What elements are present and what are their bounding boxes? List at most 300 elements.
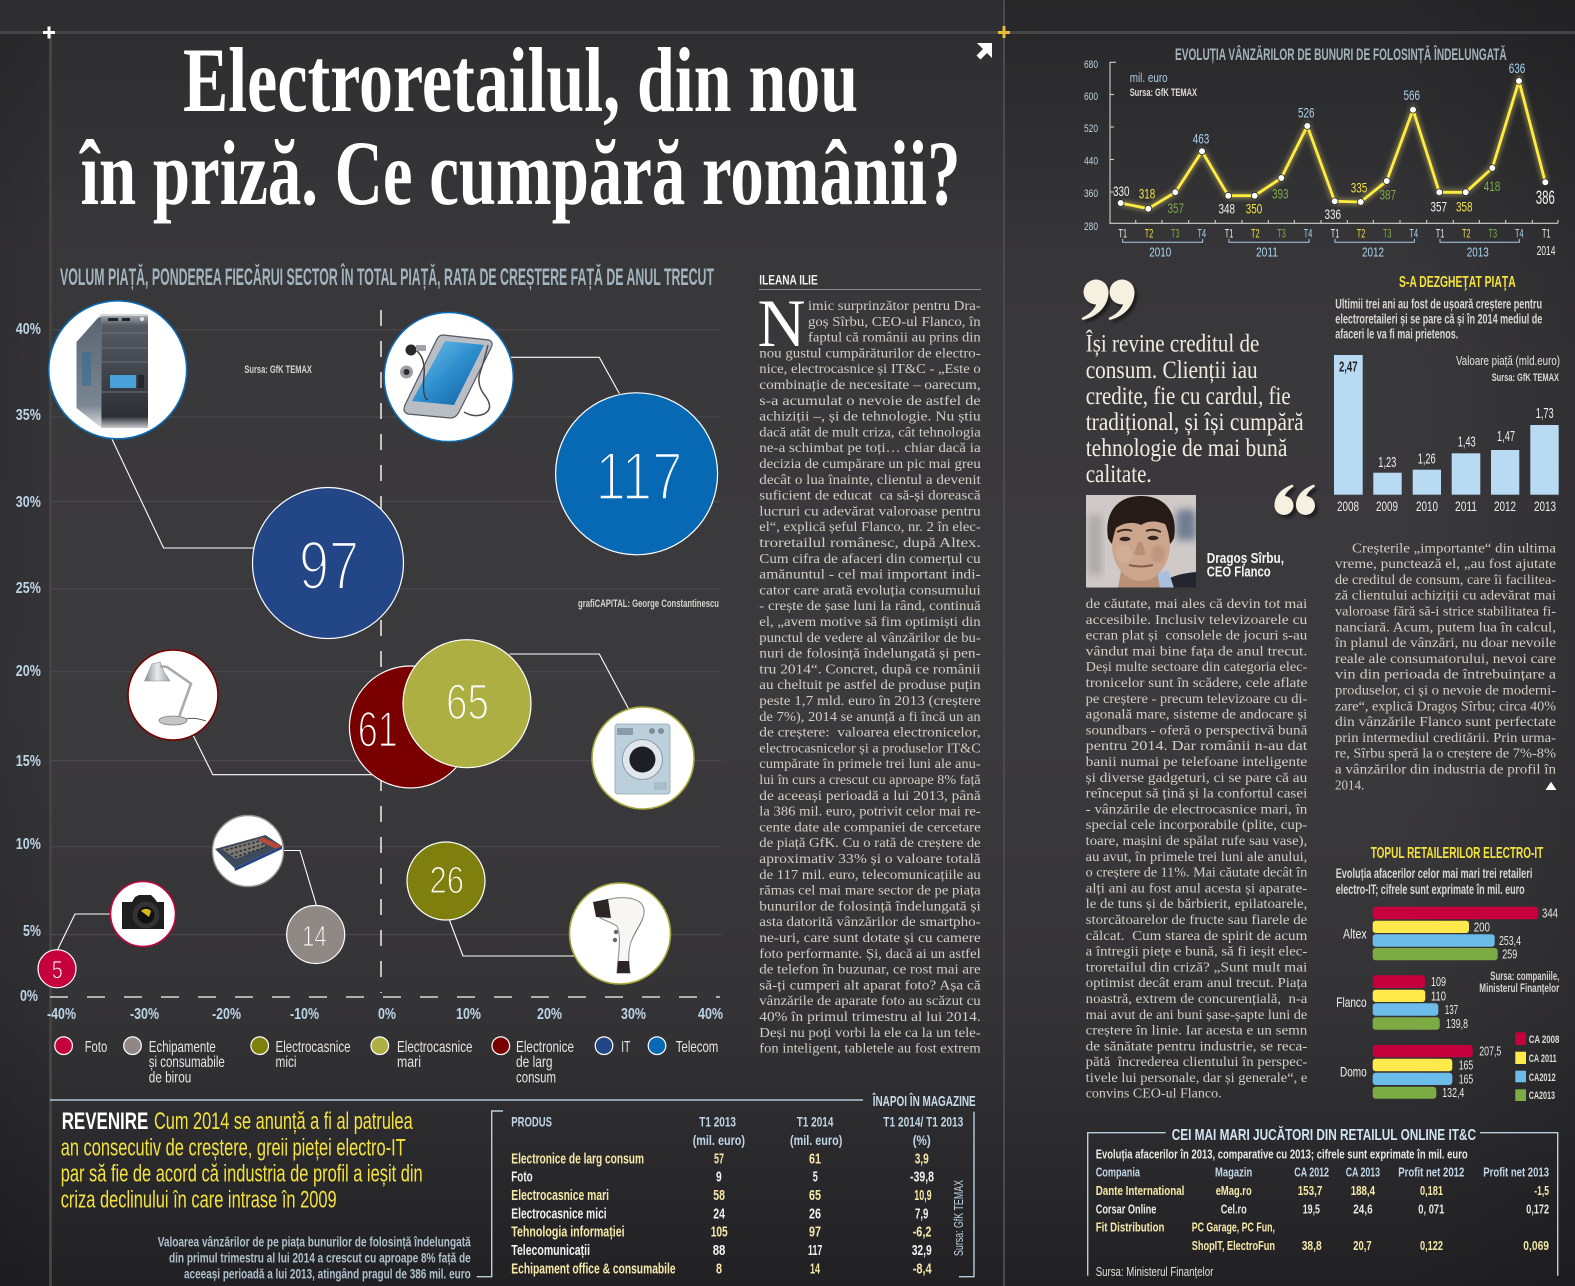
table rows: 0,181 xyxy=(1420,1183,1443,1198)
bar values: 165 xyxy=(1459,1058,1473,1072)
chart legend: de birou xyxy=(149,1070,191,1087)
text block: article column 2: toare, mașini de spălat rufe sau vase), xyxy=(1086,834,1307,849)
text block: article column 3: Creșterile „importante“ din ultima xyxy=(1352,541,1557,556)
bar values: 139,8 xyxy=(1446,1016,1468,1031)
data labels: 526 xyxy=(1298,105,1315,121)
legend xyxy=(1515,1032,1559,1102)
text block: article column 2: special cele incorporabile (plite, cup- xyxy=(1086,818,1308,833)
data labels: 357 xyxy=(1168,200,1184,216)
quarter labels: T1 xyxy=(1118,226,1127,240)
icon: gold corner plus xyxy=(998,26,1010,38)
table rows xyxy=(511,1150,934,1277)
bubble: office equipment 14 xyxy=(287,906,345,964)
intro text: afaceri le va fi mai prietenos. xyxy=(1335,325,1458,341)
table rows: 20,7 xyxy=(1353,1238,1372,1253)
text block: article column 2: agonală mare, sisteme de andocare și xyxy=(1086,708,1307,723)
bubble: telecom 117: 117 xyxy=(596,438,682,514)
text block: article column 1: nice, electrocasnice și IT&C - „Este o xyxy=(759,362,981,377)
y axis labels: 35% xyxy=(16,407,41,424)
table rows: 10,9 xyxy=(914,1187,932,1204)
table rows: 19,5 xyxy=(1303,1201,1320,1216)
text block: article column 1: rămas cel mai mare sector de pe piața xyxy=(759,884,982,899)
text block: article column 3 xyxy=(1334,541,1557,793)
text block: article column 1: Deși nu poți vorbi la ele ca la un tele- xyxy=(759,1026,981,1041)
bubble: photo 5: 5 xyxy=(52,956,63,984)
table header: Profit net 2013 xyxy=(1483,1165,1549,1180)
chart legend xyxy=(55,1037,718,1087)
text block: article column 2: reînceput să țină și la confortul casei xyxy=(1086,787,1307,802)
text block: article column 1: goș Sîrbu, CEO-ul Flanco, în xyxy=(808,315,981,330)
text block: article column 1: foto performante. Și, dacă ai un astfel xyxy=(759,947,981,962)
legend: CA 2008 xyxy=(1529,1034,1559,1046)
chart legend: Foto xyxy=(85,1039,107,1056)
text block: article column 3: valoroase fără să-i strice stabilitatea fi- xyxy=(1335,605,1556,620)
data labels: 335 xyxy=(1351,180,1367,196)
callout headline: REVENIRE xyxy=(62,1108,148,1135)
text block: article column 2: alți ani au fost anul acesta și aparate- xyxy=(1086,881,1308,896)
quarter labels: T3 xyxy=(1488,226,1497,240)
Altex bars xyxy=(1373,907,1538,960)
data labels: 318 xyxy=(1139,186,1155,202)
text block: article column 2: au avut, în primele trei luni ale anului, xyxy=(1086,850,1307,865)
bar years: 2009 xyxy=(1376,498,1398,514)
caption xyxy=(1207,550,1284,581)
data labels xyxy=(1113,60,1555,222)
table rows: 105 xyxy=(711,1224,728,1241)
table header: Compania xyxy=(1096,1165,1141,1180)
chart legend: Telecom xyxy=(676,1039,718,1056)
text block: article column 2: tronicelor sunt în scădere, cele aflate xyxy=(1086,676,1307,691)
table rows: 24 xyxy=(713,1205,725,1222)
quote text xyxy=(1086,330,1304,488)
bar years xyxy=(1337,498,1556,514)
x axis labels: 20% xyxy=(537,1006,562,1023)
icon: calculator xyxy=(212,816,284,886)
line chart: durable goods sales xyxy=(1084,45,1558,260)
text block: article column 1: achiziții –, și de tehnologie. Nu știu xyxy=(759,410,981,425)
text block: article column 1: tru 2014“. Concret, după ce românii xyxy=(759,662,981,677)
text block: article column 2: - vânzările de electrocasnice mari, în xyxy=(1086,802,1307,817)
bar values: 200 xyxy=(1474,919,1490,934)
bar years: 2011 xyxy=(1455,498,1477,514)
text block: article column 1: bunurilor de folosință îndelungată și xyxy=(759,899,981,914)
text block: article column 2: mai avut de ani buni șase-șapte luni de xyxy=(1086,1008,1307,1023)
quarter labels: T4 xyxy=(1304,226,1312,240)
text block: article column 3: vreme, punctează el, „au fost ajutate xyxy=(1335,557,1556,572)
text block: article column 2 xyxy=(1086,597,1308,1102)
text block: article column 2: troretailul din criză? „Sunt mult mai xyxy=(1086,960,1307,975)
quarter labels: T2 xyxy=(1251,226,1260,240)
text block: article column 3: din vânzările Flanco sunt perfectate xyxy=(1335,715,1556,730)
bar values: 1,47 xyxy=(1497,428,1515,445)
y axis labels: 20% xyxy=(16,663,41,680)
bar years: 2013 xyxy=(1534,498,1556,514)
table rows: eMag.ro xyxy=(1216,1183,1252,1198)
text block: article column 1: de 117 mil. euro, telecomunicațiile au xyxy=(759,868,981,883)
text block: article column 1: nuri de folosință îndelungată și pen- xyxy=(759,647,981,662)
text block: article column 1: ne-a schimbat pe toți… chiar dacă ia xyxy=(759,441,982,456)
text block: article column 1: el, „avem motive să fim optimiști din xyxy=(759,615,981,630)
icon: white corner plus xyxy=(43,26,55,38)
text block: article column 2: Deși multe sectoare din categoria elec- xyxy=(1086,660,1308,675)
table header xyxy=(511,1114,963,1148)
photo: portrait of Dragoș Sîrbu xyxy=(1086,495,1196,588)
retailer names: Flanco xyxy=(1336,994,1367,1010)
table rows: 57 xyxy=(714,1150,724,1167)
table rows: 26 xyxy=(809,1205,821,1222)
table rows xyxy=(1096,1183,1549,1253)
year labels: 2012 xyxy=(1362,244,1384,260)
table rows: 0, 071 xyxy=(1418,1201,1444,1216)
callout headline: criza declinului în care intrase în 2009 xyxy=(61,1187,337,1214)
text block: article column 1: au cheltuit pe astfel de produse puțin xyxy=(759,678,981,693)
bar values: 1,26 xyxy=(1418,450,1436,468)
bar values: 137 xyxy=(1445,1002,1458,1017)
text block: article column 1: asta datorită vânzărilor de smartpho- xyxy=(759,915,981,930)
table rows: Tehnologia informației xyxy=(511,1224,625,1241)
table rows: -8,4 xyxy=(913,1260,932,1277)
legend: CA 2011 xyxy=(1529,1053,1557,1065)
bubble: consumer electronics 61 xyxy=(349,666,471,788)
table rows: 9 xyxy=(716,1168,722,1185)
quarter labels: T4 xyxy=(1198,226,1206,240)
chart legend: mari xyxy=(397,1054,421,1071)
line chart: durable goods sales: 280 xyxy=(1084,221,1098,233)
callout headline: par să fie de acord că industria de profil a ieșit din xyxy=(61,1161,423,1188)
bubble: small appliances 26 xyxy=(407,842,485,920)
text block: article column 1: troretailul românesc, după Altex. xyxy=(759,536,981,551)
x axis labels: 40% xyxy=(698,1006,723,1023)
callout headline: an consecutiv de creștere, greii pieței electro-IT xyxy=(61,1134,406,1161)
table rows: -6,2 xyxy=(913,1224,931,1241)
year labels: 2014 xyxy=(1537,243,1555,258)
icon: hair dryer xyxy=(570,883,670,984)
chart legend: Echipamente xyxy=(149,1039,216,1056)
text block: byline: ILEANA ILIE xyxy=(759,271,818,287)
text block: article column 3: 2014. xyxy=(1335,778,1364,793)
table rows: ShopIT, ElectroFun xyxy=(1192,1238,1275,1253)
text block: article column 2: pentru 2014. Dar românii n-au dat xyxy=(1086,739,1307,754)
table rows: Electrocasnice mari xyxy=(511,1187,609,1204)
text block: article column 2: o creștere de 11%. Mai căutate decât în xyxy=(1086,866,1307,881)
table header: (%) xyxy=(913,1132,931,1148)
connector lines xyxy=(57,357,629,956)
quarter labels: T4 xyxy=(1410,226,1418,240)
text block: article column 1: ne-uri, care sunt dotate și cu camere xyxy=(759,931,981,946)
chart legend: Electrocasnice xyxy=(276,1039,351,1056)
quote text: calitate. xyxy=(1086,461,1152,488)
year labels: 2013 xyxy=(1467,244,1489,260)
Domo bars xyxy=(1373,1045,1473,1099)
quarter labels: T3 xyxy=(1383,226,1392,240)
text block: article column 1: să-ți cumperi alt aparat foto? Așa că xyxy=(759,978,982,993)
table header: PRODUS xyxy=(511,1114,552,1130)
x axis labels: -40% xyxy=(47,1006,76,1023)
table rows: 8 xyxy=(716,1260,722,1277)
bubble: consumer electronics 61: 61 xyxy=(358,702,398,758)
line chart: durable goods sales: 680 xyxy=(1084,59,1098,71)
unit and source: mil. euro xyxy=(1130,70,1168,85)
table rows: 24,6 xyxy=(1353,1201,1373,1216)
icon: smartphone xyxy=(384,312,513,442)
text block: article column 2: creștere în linie. Iar acesta e un semn xyxy=(1086,1024,1307,1039)
text block: article column 2: storcătoarelor de fructe sau fiarele de xyxy=(1086,913,1307,928)
icon: photo camera xyxy=(110,882,176,946)
quarter labels: T2 xyxy=(1462,226,1471,240)
data labels: 387 xyxy=(1380,186,1396,202)
bars xyxy=(1334,355,1559,495)
table header: CA 2012 xyxy=(1294,1165,1329,1180)
x axis labels: 30% xyxy=(621,1006,646,1023)
x axis labels: -10% xyxy=(290,1006,319,1023)
text block: article column 1: la 386 mil. euro, potrivit celor mai re- xyxy=(759,805,981,820)
table header: T1 2013 xyxy=(699,1114,736,1130)
callout note: din primul trimestru al lui 2014 a crescut cu aproape 8% față de xyxy=(169,1250,471,1266)
text block: article column 3: nanciară. Acum, putem lua în calcul, xyxy=(1335,620,1556,635)
bar values: 132,4 xyxy=(1442,1085,1464,1100)
table header: (mil. euro) xyxy=(693,1132,745,1148)
text block: article column 1: electrocasnicelor și a produselor IT&C xyxy=(759,741,981,756)
year brackets xyxy=(1123,239,1519,242)
quarter labels: T1 xyxy=(1331,226,1339,240)
text block: article column 1: decizia de cumpărare un pic mai greu xyxy=(759,457,981,472)
quarter labels: T3 xyxy=(1277,226,1286,240)
table rows: 58 xyxy=(713,1187,725,1204)
y axis labels: 15% xyxy=(16,753,41,770)
divider rule above bottom panels xyxy=(50,1099,863,1101)
title: în priză. Ce cumpără românii? xyxy=(79,122,960,224)
table source: Sursa: GfK TEMAX xyxy=(951,1180,966,1256)
table header: CA 2013 xyxy=(1346,1165,1380,1180)
data labels: 636 xyxy=(1509,60,1525,76)
bar values: 110 xyxy=(1431,988,1446,1003)
source: Sursa: GfK TEMAX xyxy=(1130,87,1197,99)
table rows: 61 xyxy=(809,1150,821,1167)
panel: online retail table xyxy=(1088,1125,1558,1279)
quarter labels: T3 xyxy=(1171,226,1180,240)
text block: article column 1: faptul că românii au prins din xyxy=(808,331,981,346)
table rows: 7,9 xyxy=(915,1205,928,1222)
text block: article column 3: prin intermediul creditării. Prin urma- xyxy=(1335,731,1556,746)
text block: article column 1: nou gustul cumpărăturilor de electro- xyxy=(759,346,981,361)
bubble: office equipment 14: 14 xyxy=(302,921,327,953)
callout note xyxy=(158,1234,471,1281)
Flanco bars xyxy=(1373,975,1440,1030)
table heading: ÎNAPOI ÎN MAGAZINE xyxy=(872,1092,976,1110)
bar values: 1,23 xyxy=(1378,454,1396,471)
text block: article column 2: tivele lui personale, dar și generale“, e xyxy=(1086,1071,1307,1086)
table header: Profit net 2012 xyxy=(1398,1165,1464,1180)
table rows: 65 xyxy=(809,1187,821,1204)
bar values: 259 xyxy=(1502,947,1517,962)
table rows: 0,069 xyxy=(1523,1238,1549,1253)
text block: article column 3: ză clientului achiziții cu adevărat mai xyxy=(1335,589,1556,604)
table header: T1 2014/ T1 2013 xyxy=(883,1114,963,1130)
icon: desk lamp xyxy=(128,650,218,740)
bar values: 344 xyxy=(1542,906,1558,920)
text block: article column 2: noastră, extrem de concurențială, n-a xyxy=(1086,992,1308,1007)
text block: article column 2: a întregii piețe e bună, să fi ieșit elec- xyxy=(1086,945,1308,960)
quarter labels: T2 xyxy=(1145,226,1153,240)
text block: article column 2: optimist decât eram anul trecut. Piața xyxy=(1086,976,1308,991)
text block: article column 1: dacă atât de mult criza, cât tehnologia xyxy=(759,425,982,440)
text block: article column 1: fon inteligent, tabletele au fost extrem xyxy=(759,1042,981,1057)
bubble: large appliances 65 xyxy=(403,640,531,768)
table rows: Echipament office & consumabile xyxy=(511,1260,676,1277)
text block: article column 3: zare“, explică Dragoș Sîrbu; circa 40% xyxy=(1335,699,1556,714)
credit note: grafiCAPITAL: George Constantinescu xyxy=(578,598,719,610)
text block: article column 1: de 7%), 2014 se anunță a fi încă un an xyxy=(759,710,981,725)
retailer names: Altex xyxy=(1343,925,1367,941)
bar values: 109 xyxy=(1431,974,1446,989)
line chart: durable goods sales: 360 xyxy=(1084,188,1098,200)
title xyxy=(79,29,960,224)
bar values: 207,5 xyxy=(1479,1044,1501,1059)
text block: article column 1: combinație de necesitate – oarecum, xyxy=(759,378,981,393)
source: Sursa: Ministerul Finanțelor xyxy=(1096,1264,1214,1279)
bar values: 165 xyxy=(1459,1071,1473,1086)
data labels: 418 xyxy=(1484,178,1500,194)
x axis labels: 0% xyxy=(378,1006,396,1023)
text block: article column 1: de aceeași perioadă a lui 2013, până xyxy=(759,789,982,804)
year labels: 2011 xyxy=(1256,244,1278,260)
table rows: 0,172 xyxy=(1526,1201,1549,1216)
table rows: Telecomunicații xyxy=(511,1242,590,1259)
year labels: 2010 xyxy=(1149,244,1171,260)
table header: T1 2014 xyxy=(797,1114,834,1130)
bubble: small appliances 26: 26 xyxy=(430,860,464,902)
text block: article column 1: vânzările de aparate foto au scăzut cu xyxy=(759,994,981,1009)
text block: article column 1: amănuntul - cel mai important indi- xyxy=(759,568,981,583)
icon: corner arrow xyxy=(976,43,992,60)
y axis labels: 10% xyxy=(16,836,41,853)
text block: article column 3: de creditul de consum, care îi facilitea- xyxy=(1335,573,1556,588)
text block: article column 3: produselor, ci și o nevoie de moderni- xyxy=(1335,684,1556,699)
text block: article column 3: re, Sîrbu speră la o creștere de 7%-8% xyxy=(1335,747,1556,762)
text block: article column 2: le de tuns și de bărbierit, epilatoarele, xyxy=(1086,897,1307,912)
text block: article column 2: călcat. Cum starea de spirit de acum xyxy=(1086,929,1307,944)
text block: article column 1: suficient de educat ca să-și dorească xyxy=(759,489,982,504)
data line stroke xyxy=(1121,81,1545,209)
bar values: 253,4 xyxy=(1499,933,1521,948)
bar values xyxy=(1431,906,1558,1100)
intro text xyxy=(1336,865,1532,897)
line chart: durable goods sales: 600 xyxy=(1084,91,1098,103)
icon: computer tower xyxy=(49,301,187,439)
text block: article column 1: cator care arată evoluția consumului xyxy=(759,583,981,598)
table rows: Dante International xyxy=(1096,1183,1184,1198)
intro text xyxy=(1335,295,1542,341)
table rows: Corsar Online xyxy=(1096,1201,1156,1216)
heading: S-A DEZGHEŢAT PIAŢA xyxy=(1399,274,1516,291)
text block: article column 1: aproximativ 33% și o valoare totală xyxy=(759,852,982,867)
table rows: 97 xyxy=(809,1224,821,1241)
bar years: 2010 xyxy=(1416,498,1438,514)
text block: article column 1: decât o lua înainte, clientul a devenit xyxy=(759,473,981,488)
panel: product table xyxy=(477,1092,976,1277)
quarter labels: T1 xyxy=(1225,226,1233,240)
bar values: 1,73 xyxy=(1536,405,1554,422)
table rows: Cel.ro xyxy=(1221,1201,1247,1216)
text block: article column 2: de sănătate pentru industrie, se reca- xyxy=(1086,1039,1308,1054)
bar values: 2,47 xyxy=(1339,358,1358,376)
quarter labels: T2 xyxy=(1357,226,1365,240)
table rows: 188,4 xyxy=(1351,1183,1376,1198)
caption: CEO Flanco xyxy=(1207,564,1271,581)
panel: pull quote xyxy=(1082,280,1318,588)
text block: article column 3: a vânzărilor din industria de profil în xyxy=(1335,763,1556,778)
text block: article column 1: s-a acumulat o nevoie de astfel de xyxy=(759,394,981,409)
bubble: telecom 117 xyxy=(556,393,718,555)
text block: article column 1: peste 1,7 mld. euro în 2013 (creștere xyxy=(759,694,981,709)
bar years: 2008 xyxy=(1337,498,1359,514)
quarter labels: T1 xyxy=(1542,226,1551,240)
text block: article column 1: - crește de șase luni la rând, continuă xyxy=(759,599,982,614)
text block: article column 1: de creștere: valoarea electronicelor, xyxy=(759,726,981,741)
icon: opening quotation mark xyxy=(1274,484,1318,518)
table rows: Foto xyxy=(511,1168,533,1185)
table rows: 153,7 xyxy=(1298,1183,1322,1198)
table rows: -1,5 xyxy=(1534,1183,1549,1198)
table rows: Electronice de larg consum xyxy=(511,1150,644,1167)
data labels: 357 xyxy=(1430,198,1447,214)
data labels: 336 xyxy=(1324,206,1341,222)
table rows: Electrocasnice mici xyxy=(511,1205,607,1222)
year labels xyxy=(1149,243,1555,260)
quote text: credite, fie cu cardul, fie xyxy=(1086,383,1291,410)
table rows: 3,9 xyxy=(915,1150,929,1167)
text block: article column 3: vin din perioada de întrebuințare a xyxy=(1335,668,1557,683)
data labels: 566 xyxy=(1404,87,1420,103)
quarter labels: T4 xyxy=(1515,226,1524,240)
icon: closing quotation mark xyxy=(1082,280,1138,323)
icon: article end triangle xyxy=(1546,782,1556,790)
icon: washing machine xyxy=(592,707,694,809)
text block: article column 1 xyxy=(758,285,982,1057)
chart: market bubble chart xyxy=(16,301,723,1023)
bubble: photo 5 xyxy=(38,950,76,988)
text block: article column 2: convins CEO-ul Flanco. xyxy=(1086,1086,1222,1102)
text block: article column 1: 40% în primul trimestru al lui 2014. xyxy=(759,1010,981,1025)
line chart: durable goods sales: 440 xyxy=(1084,156,1098,168)
retailer names xyxy=(1336,925,1367,1080)
callout note: aceeași perioadă a lui 2013, atingând pragul de 386 mil. euro xyxy=(184,1265,471,1281)
chart legend: IT xyxy=(621,1039,630,1056)
text block: article column 3: în planul de vânzări, nu doar nevoile xyxy=(1334,636,1556,651)
bubble: large appliances 65: 65 xyxy=(446,674,489,730)
y axis labels: 40% xyxy=(16,321,41,338)
y axis labels: 25% xyxy=(16,580,41,597)
text block: article column 1: el“, explică șeful Flanco, nr. 2 în elec- xyxy=(759,520,981,535)
table rows: Fit Distribution xyxy=(1096,1220,1164,1235)
text block: article column 3: reale ale consumatorului, nevoi care xyxy=(1335,652,1556,667)
quote text: Își revine creditul de xyxy=(1086,330,1259,358)
text block: article column 2: vândut mai bine fața de anul trecut. xyxy=(1086,644,1307,659)
text block: article column 2: pătă încrederea clientului în perspec- xyxy=(1086,1055,1308,1070)
text block: article column 1: de telefon în buzunar, ce rost mai are xyxy=(759,963,981,978)
table rows: 88 xyxy=(713,1242,725,1259)
callout headline xyxy=(61,1108,423,1214)
quote text: tehnologie de mai bună xyxy=(1086,435,1287,462)
table rows: 38,8 xyxy=(1302,1238,1322,1253)
text block: article column 1: imic surprinzător pentru Dra- xyxy=(808,299,981,314)
text block: article column 1: lui în curs a crescut cu aproape 8% față xyxy=(759,773,981,788)
bubble: IT 97 xyxy=(252,488,404,638)
callout note: Valoarea vânzărilor de pe piața bunurilor de folosință îndelungată xyxy=(158,1234,471,1250)
quarter labels xyxy=(1118,226,1551,240)
y axis labels: 0% xyxy=(20,988,38,1005)
text block: article column 1: de piață GfK. Cu o rată de creștere de xyxy=(759,836,981,851)
